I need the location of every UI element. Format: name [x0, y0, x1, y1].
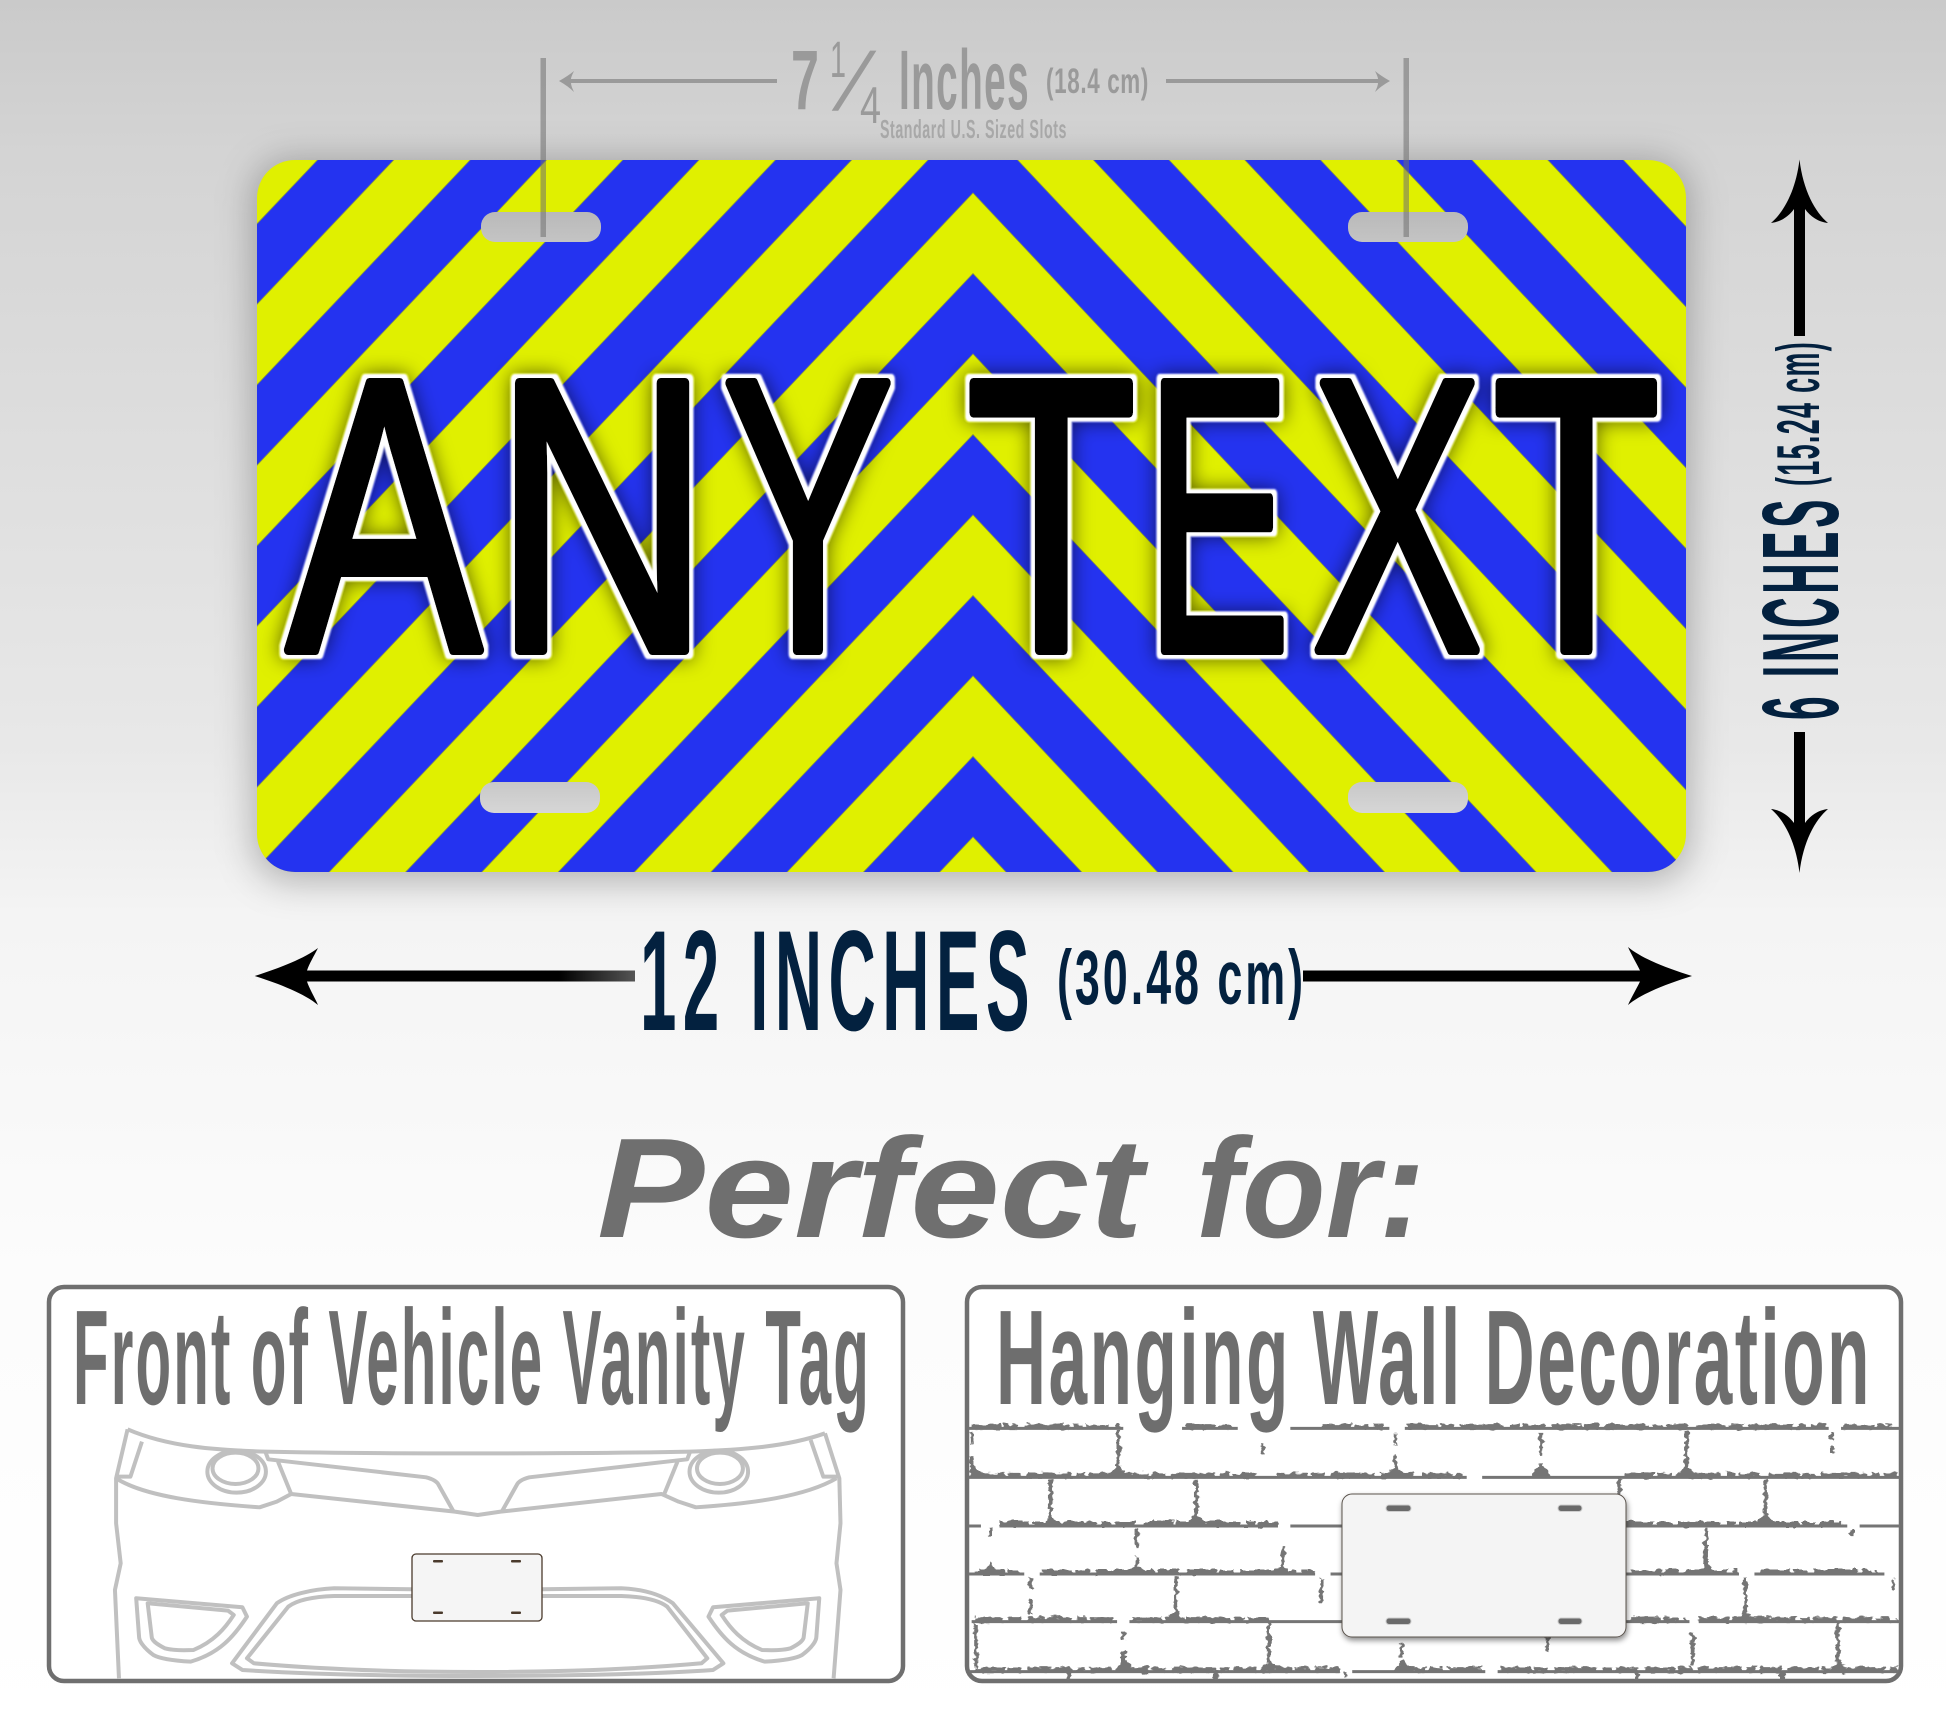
panel frame: [49, 1287, 903, 1681]
slot spacing label: 4: [860, 77, 881, 135]
right grey arrow: [1166, 71, 1390, 92]
plate lettering: ANY TEXT: X: [1312, 300, 1482, 733]
mini plate slots: [433, 1560, 521, 1614]
chevron stripes: [257, 160, 1686, 872]
right arrow: [1303, 947, 1692, 1005]
panel: license plate: [257, 160, 1686, 872]
slots caption: Standard U.S. Sized Slots: [880, 114, 1067, 144]
plate lettering: ANY TEXT: E: [1146, 300, 1290, 733]
slot spacing label: 7: [791, 33, 819, 127]
plate shadow: [253, 160, 1690, 882]
blank plate on wall: [1342, 1494, 1626, 1637]
plate lettering: ANY TEXT: N: [494, 300, 710, 733]
width dimension: 12 inches: 12 INCHES: [640, 902, 1036, 1061]
slot spacing label: /: [826, 35, 882, 127]
panel frame: [967, 1287, 1901, 1681]
down arrow: [1771, 732, 1828, 873]
slot guide lines: [540, 58, 1409, 237]
panel: hanging wall decoration: [967, 1282, 1903, 1682]
rough mortar and joints: [969, 1427, 1897, 1682]
height dimension: 6 inches: (15.24 cm): [1765, 341, 1832, 486]
label: 30.48 cm: (30.48 cm): [1057, 935, 1306, 1021]
plate mounting slots: [480, 212, 1468, 813]
slot spacing label: (18.4 cm): [1046, 62, 1149, 101]
width dimension: 12 inches: [255, 902, 1692, 1061]
plate lettering: ANY TEXT: T: [1493, 300, 1660, 733]
up arrow: [1771, 160, 1828, 336]
plate lettering: ANY TEXT: A: [287, 300, 482, 733]
slot spacing label: Inches: [899, 33, 1030, 127]
slot spacing dimension: 7 1/4 inches: [540, 31, 1409, 237]
infographic canvas: Front of Vehicle Vanity Tag: [73, 1282, 871, 1433]
mortar base lines: [969, 1428, 1903, 1672]
brick wall: [969, 1427, 1903, 1682]
slot spacing label: 1: [830, 31, 846, 88]
height dimension: 6 inches: 6 INCHES: [1740, 496, 1862, 720]
left arrow: [255, 948, 635, 1005]
plate lettering: ANY TEXT: T: [967, 300, 1136, 733]
heading: Perfect for: for:: [1196, 1109, 1425, 1268]
mini plate on bumper: [412, 1554, 542, 1621]
left grey arrow: [559, 71, 777, 92]
plate lettering: ANY TEXT: Y: [723, 300, 890, 733]
heading: Perfect for: Perfect: [597, 1109, 1149, 1268]
blank plate slots: [1386, 1505, 1582, 1624]
slot spacing label: [791, 31, 1149, 135]
panel: front of vehicle: [49, 1282, 903, 1681]
car front outline: [115, 1429, 840, 1678]
